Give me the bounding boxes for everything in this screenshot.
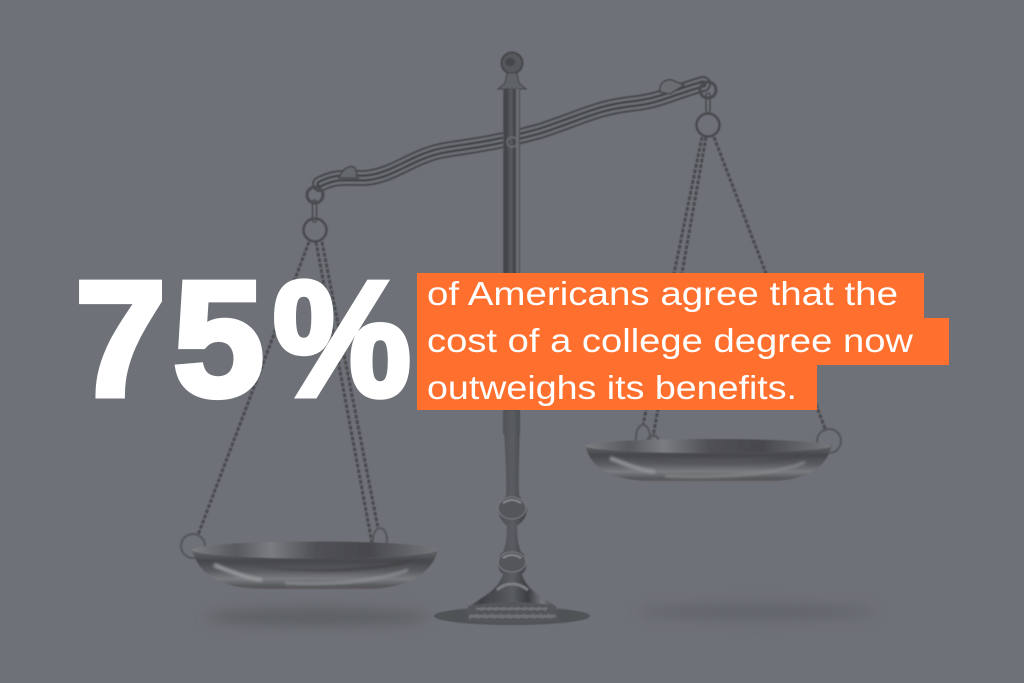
line 2: cost of a college degree now xyxy=(427,322,913,359)
base plate xyxy=(434,602,590,625)
orange highlight block xyxy=(417,273,949,410)
scale illustration xyxy=(181,52,875,626)
balance beam xyxy=(320,80,703,184)
line 3: outweighs its benefits. xyxy=(427,369,797,406)
left hanger rings xyxy=(304,187,326,242)
digits: 75 xyxy=(75,248,264,430)
right pan xyxy=(585,425,841,481)
line 1: of Americans agree that the xyxy=(427,275,898,312)
central post xyxy=(470,52,555,606)
shadow: left pan xyxy=(205,608,429,626)
shadow: right pan xyxy=(639,604,875,620)
chains: left pan xyxy=(198,242,378,543)
right hanger rings xyxy=(696,82,720,136)
chains: right pan xyxy=(643,137,826,437)
statement text xyxy=(427,275,913,406)
percent sign: % xyxy=(273,248,411,430)
big statistic xyxy=(75,248,411,430)
left pan xyxy=(181,528,438,589)
